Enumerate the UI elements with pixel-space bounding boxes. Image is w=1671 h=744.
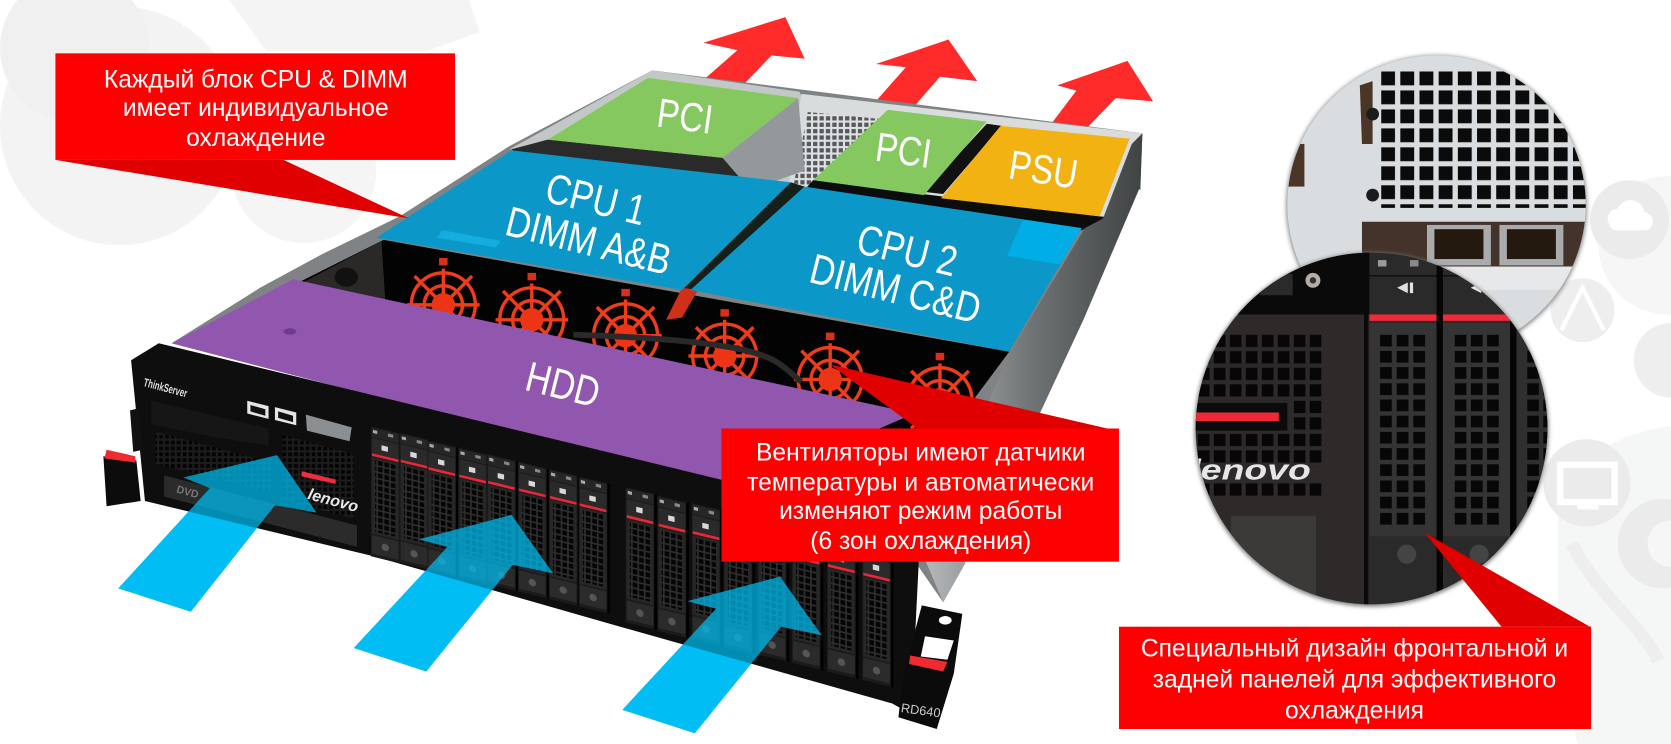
zone labels: PCI [654,89,716,143]
USB ports [247,401,296,425]
callout: fans: температуры и автоматически [747,469,1094,496]
server rack unit [103,70,1142,729]
red stripe [1194,412,1279,421]
callout: fans: (6 зон охлаждения) [810,528,1031,555]
icon: monitor [1560,465,1615,509]
callout: CPU and DIMM cooling: охлаждение [186,125,325,152]
zone labels: CPU 1 [541,165,651,235]
brand: lenovo: lenovo [1190,455,1311,487]
panel: PCI right [813,110,987,195]
right rack ear: RD640 [900,700,942,720]
zone labels: PCI [873,123,934,177]
callout: panel design [1119,533,1591,729]
panel: HDD [172,279,914,490]
icon: cloud [1608,200,1653,230]
zone labels: PSU [1006,141,1081,197]
glossy panel [151,401,269,446]
zoom circle: rear panel [1283,52,1590,334]
mesh vents [156,432,354,518]
panel: CPU 1 [376,150,791,290]
RJ45 port 1 [1427,225,1491,265]
callout: CPU and DIMM cooling: имеет индивидуальное [123,95,389,122]
callout: panel design: задней панелей для эффективного [1153,666,1556,693]
callout: fans: изменяют режим работы [779,498,1062,525]
brand: ThinkServer: ThinkServer [142,376,189,400]
brand: lenovo: lenovo [306,486,360,516]
optical drive [164,475,357,547]
panel: PCI left [548,78,798,158]
chassis interior [172,70,1142,602]
callout: panel design: Специальный дизайн фронтальной и [1141,636,1568,663]
red exhaust arrows [703,17,1153,130]
zone labels: DIMM A&B [501,198,676,285]
zone labels: DIMM C&D [805,246,985,333]
callout: fans [721,365,1119,562]
icon: triangle [1561,288,1604,330]
drive bays [371,426,894,688]
cable [573,335,801,382]
blue intake arrows: translucent overlay [118,455,822,733]
side wall [925,133,1142,602]
right rack ear [898,605,962,729]
zone labels: CPU 2 [852,216,962,286]
callout: CPU and DIMM cooling [55,53,455,219]
blue intake arrows: base colour [118,455,822,733]
callout: panel design: охлаждения [1285,697,1424,724]
RJ45 port 2 [1499,225,1563,265]
red stripe [302,471,336,484]
drive carrier 1 [1369,255,1437,602]
front panel: DVD [175,484,200,501]
zone labels [501,89,1081,417]
CPU gap [682,182,805,290]
zone labels: HDD [521,353,605,417]
callout: fans: Вентиляторы имеют датчики [756,439,1086,466]
drive carrier 2 [1443,255,1510,602]
panel: PSU [941,126,1130,216]
callout: CPU and DIMM cooling: Каждый блок CPU & DIMM [104,66,408,93]
zoom circle: front panel [1190,251,1559,613]
panel: CPU 2 [691,187,1082,352]
left rack ear [103,408,143,506]
fans bay [266,240,1009,448]
front panel [131,343,919,714]
VGA port [306,415,352,441]
